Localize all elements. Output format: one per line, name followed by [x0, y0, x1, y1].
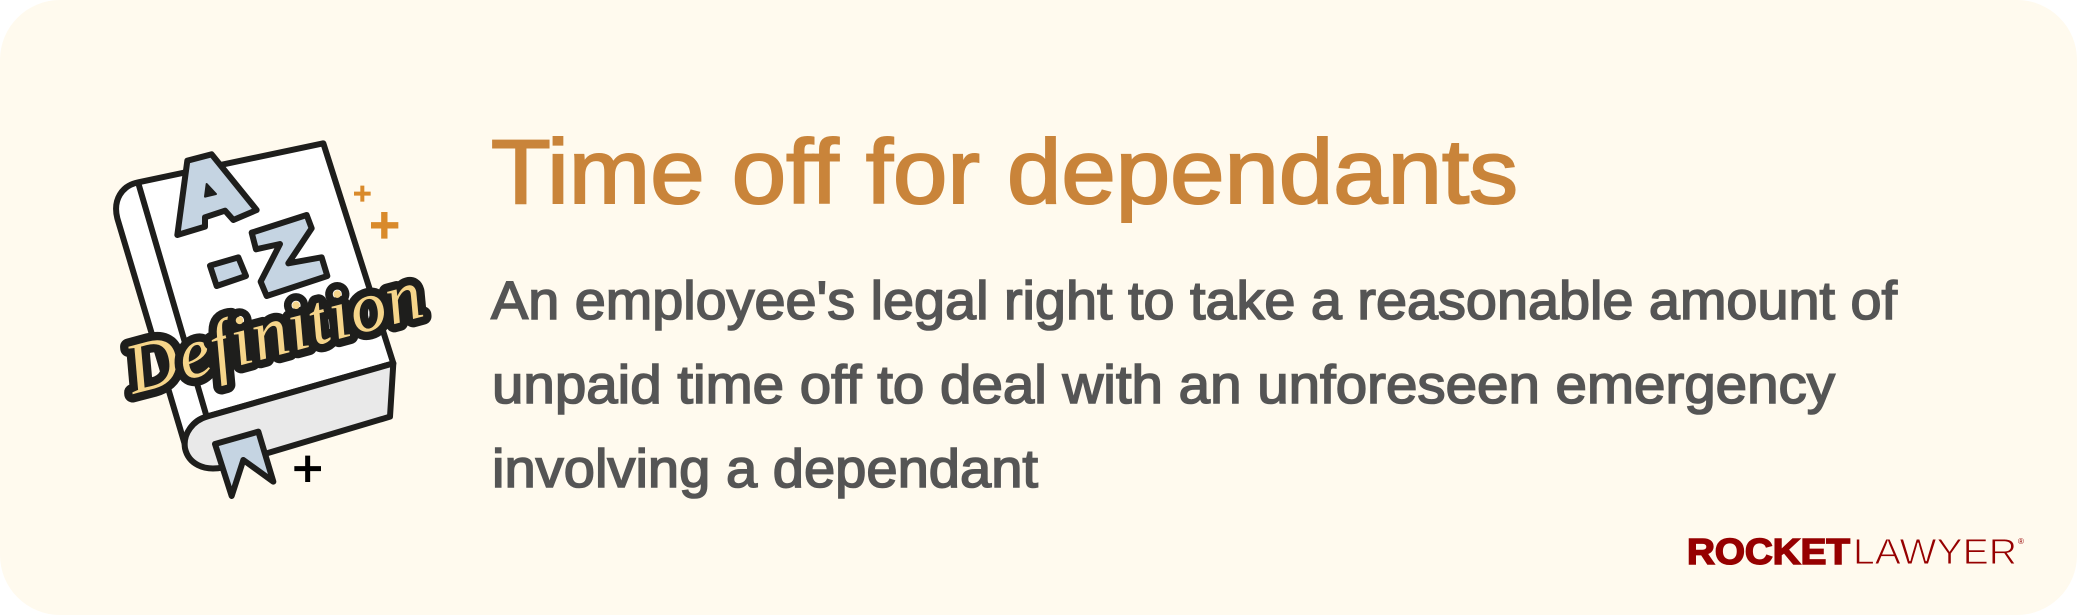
definition text — [491, 271, 1898, 499]
definition text: involving a dependant — [492, 439, 1038, 499]
logo: Rocket Lawyer: LAWYER — [1853, 531, 2017, 572]
logo: Rocket Lawyer: ROCKET — [1687, 531, 1850, 572]
sparkle: black plus — [294, 456, 321, 482]
title: Time off for dependants — [491, 122, 1518, 223]
letter A — [177, 154, 257, 235]
script label: Definition: Definition — [116, 254, 430, 410]
dash — [210, 257, 246, 286]
icon: definition book — [116, 143, 430, 496]
logo: Rocket Lawyer — [1687, 531, 2024, 572]
book pages — [185, 363, 393, 468]
bookmark — [215, 432, 273, 496]
book cover — [116, 143, 393, 448]
letter Z — [252, 215, 327, 296]
logo: Rocket Lawyer: ® — [2018, 537, 2024, 546]
definition text: An employee's legal right to take a reasonable amount of — [491, 271, 1898, 331]
spine line — [138, 183, 207, 417]
sparkle: large orange plus — [371, 212, 398, 239]
definition text: unpaid time off to deal with an unforeseen emergency — [492, 355, 1835, 415]
sparkle: small orange plus — [354, 186, 371, 202]
